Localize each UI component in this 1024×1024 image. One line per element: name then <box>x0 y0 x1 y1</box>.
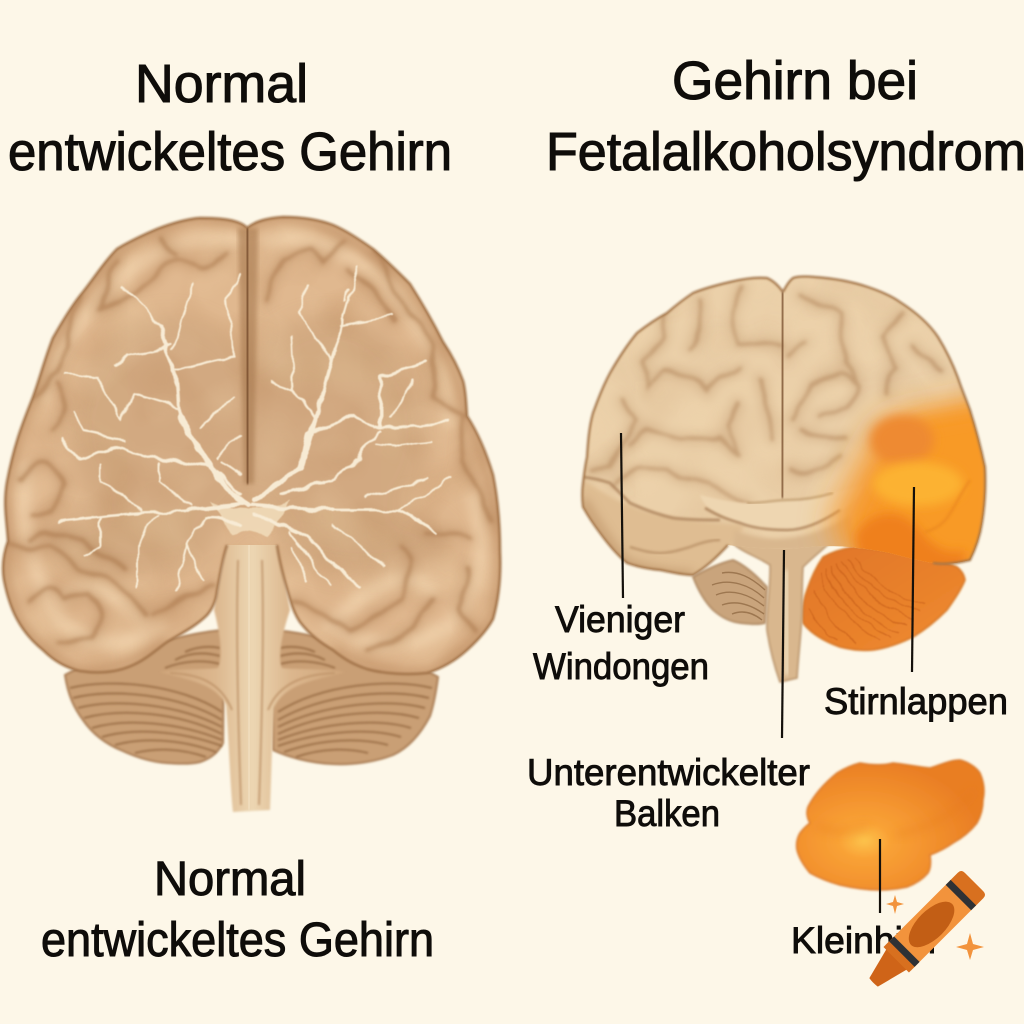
label: Weniger Windungen: Vieniger <box>555 599 685 640</box>
gyri highlights <box>24 238 481 644</box>
label: Weniger Windungen <box>533 433 709 687</box>
label: Balken: Unterentwickelter <box>527 752 810 793</box>
illustration: FAS brain <box>527 270 1008 834</box>
outline <box>3 217 500 674</box>
inner dark region behind tree <box>45 315 450 575</box>
title: FAS brain <box>546 51 1024 182</box>
orange lower lobe <box>803 547 965 650</box>
sulci <box>7 237 490 650</box>
temporal lobe shading <box>580 480 745 578</box>
icon: crayon with sparkles <box>861 869 987 995</box>
caption: normal brain: Normal <box>154 853 306 906</box>
midline fissure <box>247 228 248 484</box>
caption: normal brain: entwickeltes Gehirn <box>41 914 434 967</box>
mottled shading <box>10 236 492 642</box>
gyri lines <box>590 287 940 503</box>
soft gyral shadows <box>590 287 940 503</box>
cerebellum <box>65 630 438 764</box>
orange gyri <box>870 415 934 465</box>
title: FAS brain: Gehirn bei <box>672 51 918 111</box>
title: normal brain <box>8 54 452 182</box>
midline fissure <box>782 292 783 498</box>
label: Balken <box>527 550 810 834</box>
cerebrum <box>575 270 1000 580</box>
outline <box>582 276 985 575</box>
mottled shading <box>575 270 995 580</box>
tan fill under band <box>732 522 855 548</box>
illustration: normal developed brain <box>0 210 510 812</box>
brain stem with arms <box>160 540 345 812</box>
orange base <box>830 395 1000 580</box>
illustration: separate orange cerebellum <box>797 760 984 913</box>
white matter branches <box>60 268 450 591</box>
small cerebellum back part <box>693 560 767 624</box>
title: normal brain: entwickeltes Gehirn <box>8 122 452 182</box>
label: Kleinhirn: Kleinhirn <box>791 920 936 961</box>
label: Stirnlappen: Stirnlappen <box>824 681 1008 722</box>
label: Balken: Balken <box>614 793 720 834</box>
caption: normal brain <box>41 853 434 967</box>
callosum band <box>702 496 827 527</box>
title: normal brain: Normal <box>135 54 308 114</box>
cerebrum <box>0 210 510 680</box>
brain stem <box>728 528 835 682</box>
inner rim shading <box>5 218 247 672</box>
label: Weniger Windungen: Windongen <box>533 646 709 687</box>
soft gyral shadows <box>7 237 490 650</box>
